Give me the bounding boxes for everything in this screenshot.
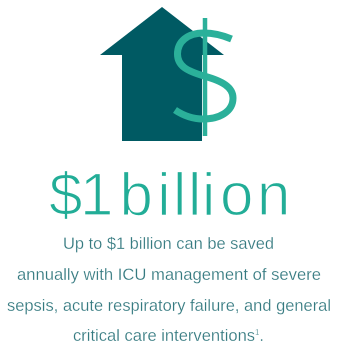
text line 1: Up to $1 billion can be saved	[63, 234, 274, 253]
icon: house	[100, 7, 224, 141]
text line 4: .	[259, 326, 264, 345]
text line 4: critical care interventions	[73, 326, 260, 345]
icon: house with dollar sign	[100, 7, 233, 141]
text line 2: annually with ICU management of severe	[17, 265, 321, 284]
text block: description	[7, 234, 331, 345]
icon: dollar sign	[175, 18, 233, 136]
text line 4: 1	[255, 328, 260, 337]
heading: $1 billion: $1 billion	[49, 161, 290, 228]
text line 3: sepsis, acute respiratory failure, and general	[7, 296, 331, 315]
